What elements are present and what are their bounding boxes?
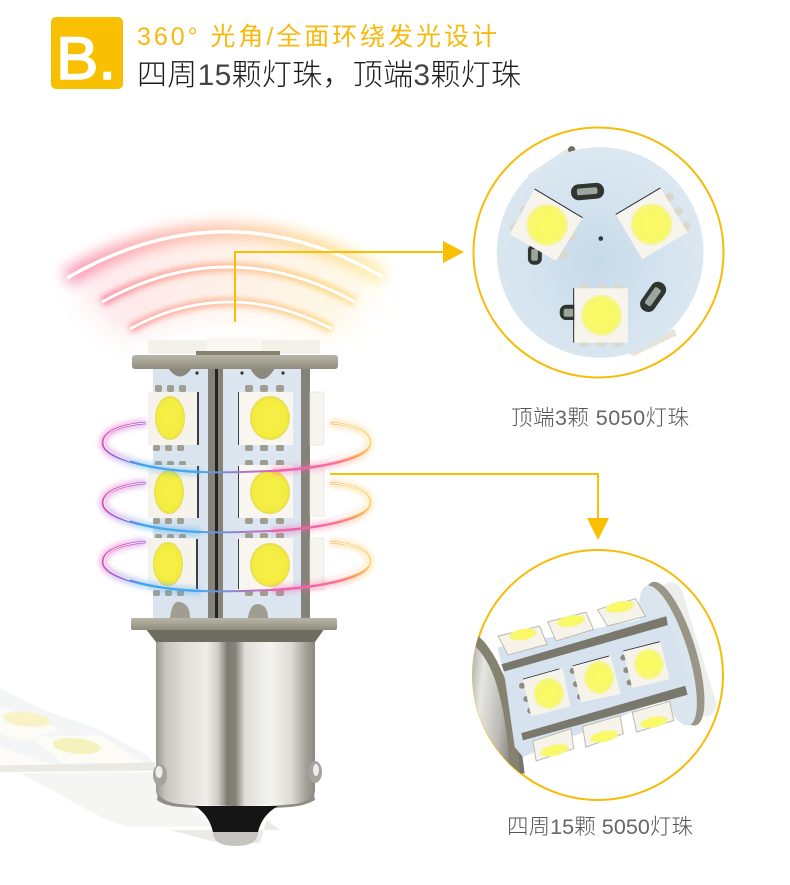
resistors [528,182,669,320]
bulb contact tip [195,806,278,846]
lower LED row [533,701,674,761]
light arcs above bulb [67,232,383,340]
label: side LEDs: 四周15颗 5050灯珠 [507,815,693,839]
bulb base in close-up [472,636,525,774]
bottom plate [131,618,337,642]
left column LEDs [148,385,199,596]
right plate [639,582,716,726]
circle callout: top LEDs [474,128,724,378]
side LEDs [310,392,324,590]
arrow: side LEDs callout [330,474,609,540]
circle callout: side LEDs [465,550,723,800]
heading: black main title: 四周15颗灯珠，顶端3颗灯珠 [137,59,521,92]
header badge B.: B. [56,25,116,92]
right column LEDs [238,385,293,596]
top plate [132,355,338,369]
heading: orange subtitle: 360° 光角/全面环绕发光设计 [137,23,497,51]
top view board [497,146,703,358]
top LEDs [148,337,320,355]
label: top LEDs: 顶端3颗 5050灯珠 [511,406,689,430]
glowing rings around bulb [103,423,370,591]
top LED chips [510,188,691,347]
reflection under bulb [0,688,280,843]
middle LED row [519,642,670,717]
arrow: top LEDs callout [235,241,464,322]
LED bulb [131,337,338,846]
upper LED row [498,599,646,655]
bulb metal base [153,640,322,809]
circuit board [497,615,692,757]
bulb circuit board [153,368,310,618]
